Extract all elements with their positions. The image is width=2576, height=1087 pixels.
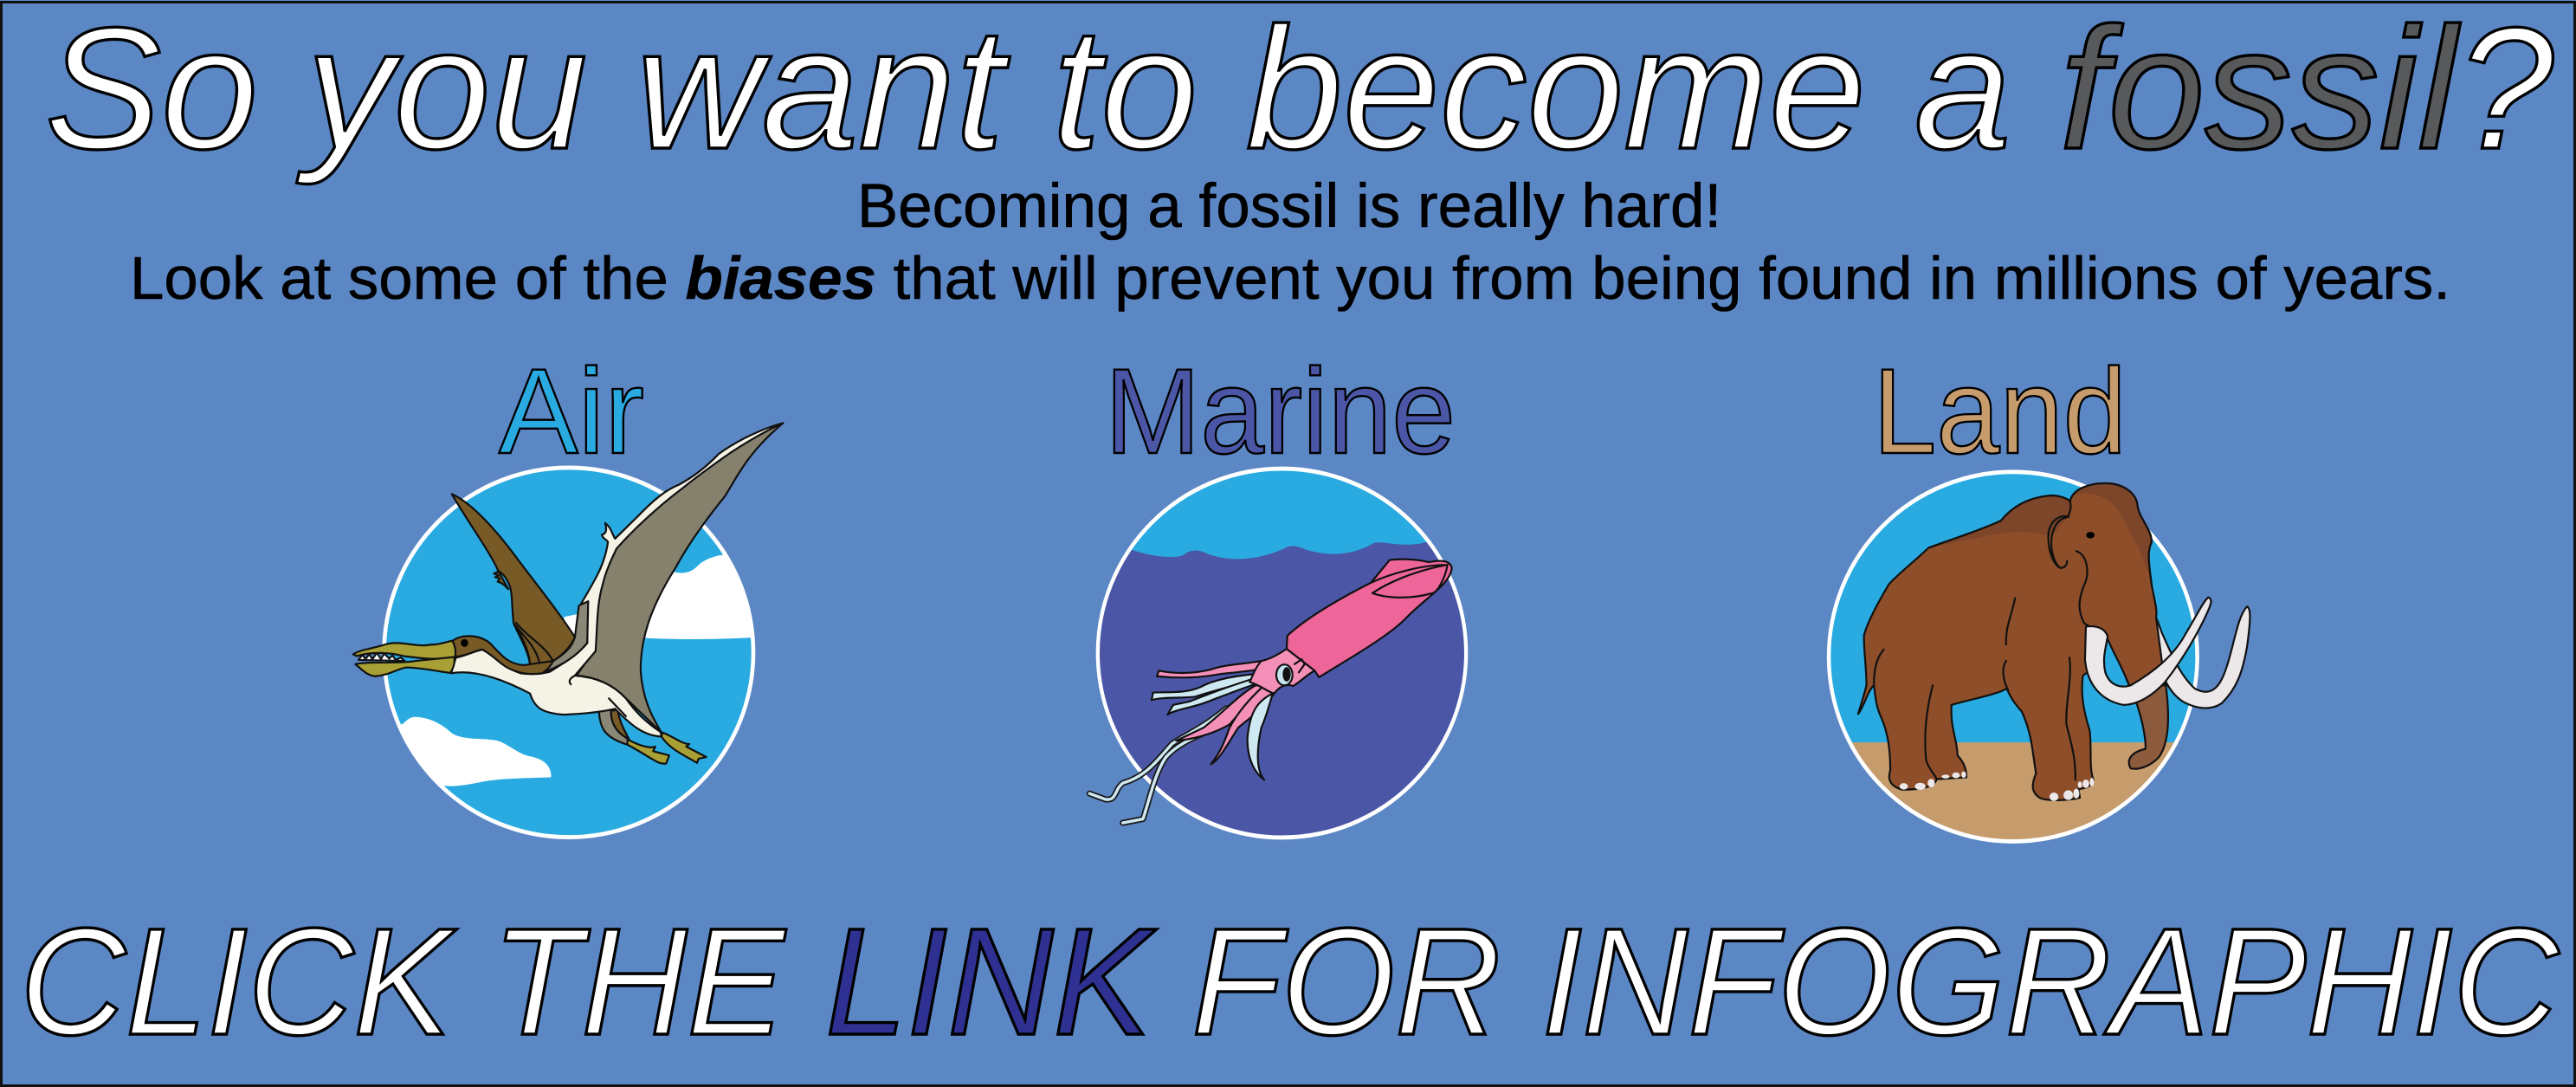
sky circle <box>384 468 753 838</box>
water surface sky <box>1132 471 1427 560</box>
squid <box>1089 560 1452 823</box>
heading: Air: Air <box>499 343 644 479</box>
subtitle text block: Look at some of the biases that will prevent you from being found in millions of years. <box>130 244 2450 312</box>
pterosaur <box>353 423 783 764</box>
circle outline <box>1098 469 1466 838</box>
heading: Marine: Marine <box>1105 343 1456 479</box>
panel: land mammoth icon <box>1810 472 2250 846</box>
circle outline <box>1829 472 2198 841</box>
call to action: CLICK THE LINK FOR INFOGRAPHIC <box>20 897 2560 1067</box>
heading: Land: Land <box>1873 343 2127 479</box>
panel: air pterosaur icon <box>353 423 783 838</box>
circle outline <box>384 468 753 838</box>
sky circle <box>1829 472 2198 841</box>
subtitle text block <box>130 172 2450 312</box>
panel: marine squid icon <box>1089 444 1466 838</box>
clouds <box>391 555 759 786</box>
ground <box>1851 742 2174 839</box>
mammoth <box>1858 483 2250 801</box>
deep water circle <box>1098 469 1466 838</box>
subtitle text block: Becoming a fossil is really hard! <box>857 172 1721 241</box>
